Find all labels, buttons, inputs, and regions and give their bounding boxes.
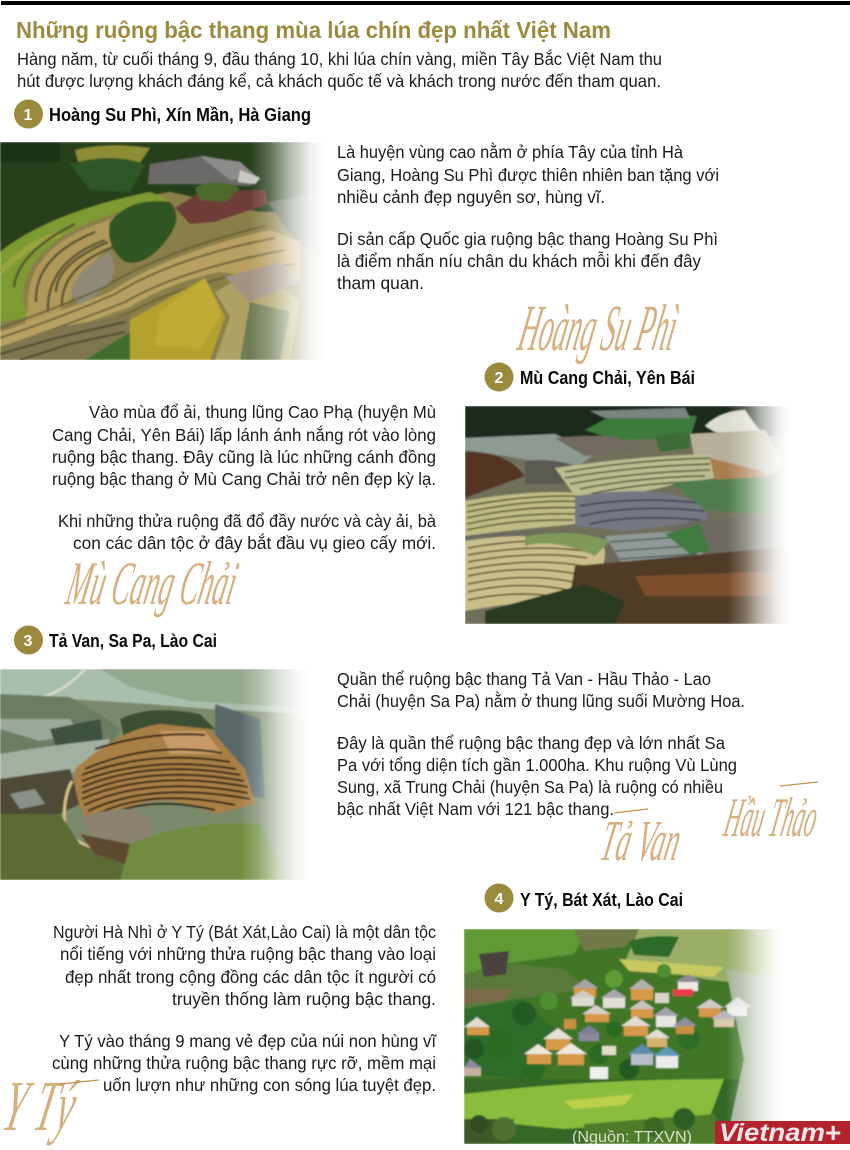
- heading 3: [14, 626, 217, 654]
- logo: Vietnam+: [715, 1117, 850, 1148]
- text block 4: Y Tý vào tháng 9 mang vẻ đẹp của núi non hùng vĩ: [59, 1031, 437, 1051]
- photo 2: Mù Cang Chải terraces: [465, 406, 795, 624]
- text block 2: Vào mùa đổ ải, thung lũng Cao Phạ (huyện Mù: [89, 402, 436, 422]
- signature: Y Tý: Y Tý: [0, 1066, 84, 1146]
- text block 2: ruộng bậc thang ở Mù Cang Chải trở nên đẹp kỳ lạ.: [52, 469, 436, 489]
- signature: Y Tý: [0, 1066, 99, 1146]
- heading 4: 4: [495, 891, 504, 908]
- text block 2: Cang Chải, Yên Bái) lấp lánh ánh nắng rót vào lòng: [52, 424, 436, 445]
- logo: Vietnam+: Vietnam: [719, 1119, 825, 1147]
- text: Mù Cang Chải: [61, 549, 244, 618]
- heading 2: [484, 362, 695, 392]
- text block 1: Giang, Hoàng Su Phì được thiên nhiên ban tặng với: [337, 165, 719, 185]
- intro text: [17, 48, 662, 91]
- text block 1: tham quan.: [337, 273, 424, 293]
- text block 4: [52, 922, 437, 1095]
- text block 2: ruộng bậc thang. Đây cũng là lúc những cánh đồng: [52, 447, 436, 467]
- text block 3: Quần thể ruộng bậc thang Tả Van - Hầu Thảo - Lao: [337, 669, 711, 689]
- text block 1: là điểm nhấn níu chân du khách mỗi khi đến đây: [337, 250, 701, 271]
- text block 2: [52, 402, 436, 553]
- photo 1: Hoàng Su Phì terraces: [0, 142, 330, 362]
- heading 3: Tả Van, Sa Pa, Lào Cai: [49, 631, 217, 651]
- heading 2: Mù Cang Chải, Yên Bái: [520, 368, 695, 388]
- text block 2: Khi những thửa ruộng đã đổ đầy nước và cày ải, bà: [58, 511, 436, 531]
- text block 4: truyền thống làm ruộng bậc thang.: [172, 989, 436, 1009]
- title: Những ruộng bậc thang mùa lúa chín đẹp nhất Việt Nam: [16, 17, 611, 43]
- text block 1: nhiều cảnh đẹp nguyên sơ, hùng vĩ.: [337, 187, 605, 207]
- text block 2: con các dân tộc ở đây bắt đầu vụ gieo cấy mới.: [73, 532, 436, 553]
- photo 4: Y Tý village: [464, 929, 789, 1144]
- text block 3: bậc nhất Việt Nam với 121 bậc thang.: [337, 799, 614, 819]
- signature: Tả Van: [595, 809, 687, 873]
- heading 4: Y Tý, Bát Xát, Lào Cai: [520, 890, 683, 910]
- text block 1: Là huyện vùng cao nằm ở phía Tây của tỉnh Hà: [337, 141, 683, 162]
- logo: Vietnam+: +: [825, 1117, 841, 1148]
- heading 4: [484, 884, 683, 912]
- text block 3: Pa với tổng diện tích gần 1.000ha. Khu ruộng Vù Lùng: [337, 755, 737, 775]
- heading 1: 1: [24, 107, 33, 124]
- heading 2: 2: [495, 370, 504, 387]
- text block 3: Sung, xã Trung Chải (huyện Sa Pa) là ruộng có nhiều: [337, 777, 723, 797]
- source credit: (Nguồn: TTXVN): [572, 1129, 692, 1146]
- text block 3: Chải (huyện Sa Pa) nằm ở thung lũng suối Mường Hoa.: [337, 690, 745, 711]
- text block 4: nổi tiếng với những thửa ruộng bậc thang vào loại: [60, 944, 436, 964]
- text block 4: đẹp nhất trong cộng đồng các dân tộc ít người có: [65, 967, 436, 987]
- text block 1: Di sản cấp Quốc gia ruộng bậc thang Hoàng Su Phì: [337, 229, 718, 249]
- heading 1: Hoàng Su Phì, Xín Mần, Hà Giang: [49, 105, 311, 125]
- intro text: hút được lượng khách đáng kể, cả khách quốc tế và khách trong nước đến tham quan.: [17, 71, 661, 91]
- heading 1: [14, 100, 311, 128]
- signature: Tả Van: Tả Van: [595, 809, 687, 873]
- text block 4: uốn lượn như những con sóng lúa tuyệt đẹp.: [103, 1075, 436, 1095]
- intro text: Hàng năm, từ cuối tháng 9, đầu tháng 10, khi lúa chín vàng, miền Tây Bắc Việt Nam thu: [17, 48, 662, 69]
- text block 1: [337, 141, 719, 293]
- trees: [464, 964, 719, 1141]
- text block 4: Người Hà Nhì ở Y Tý (Bát Xát,Lào Cai) là một dân tộc: [53, 922, 436, 942]
- heading 3: 3: [24, 633, 33, 650]
- village houses: [464, 974, 752, 1079]
- text block 3: Đây là quần thể ruộng bậc thang đẹp và lớn nhất Sa: [337, 733, 725, 753]
- photo 3: Tả Van terraces: [0, 669, 315, 880]
- text block 3: [337, 669, 745, 819]
- text block 4: cùng những thửa ruộng bậc thang rực rỡ, mềm mại: [52, 1053, 436, 1073]
